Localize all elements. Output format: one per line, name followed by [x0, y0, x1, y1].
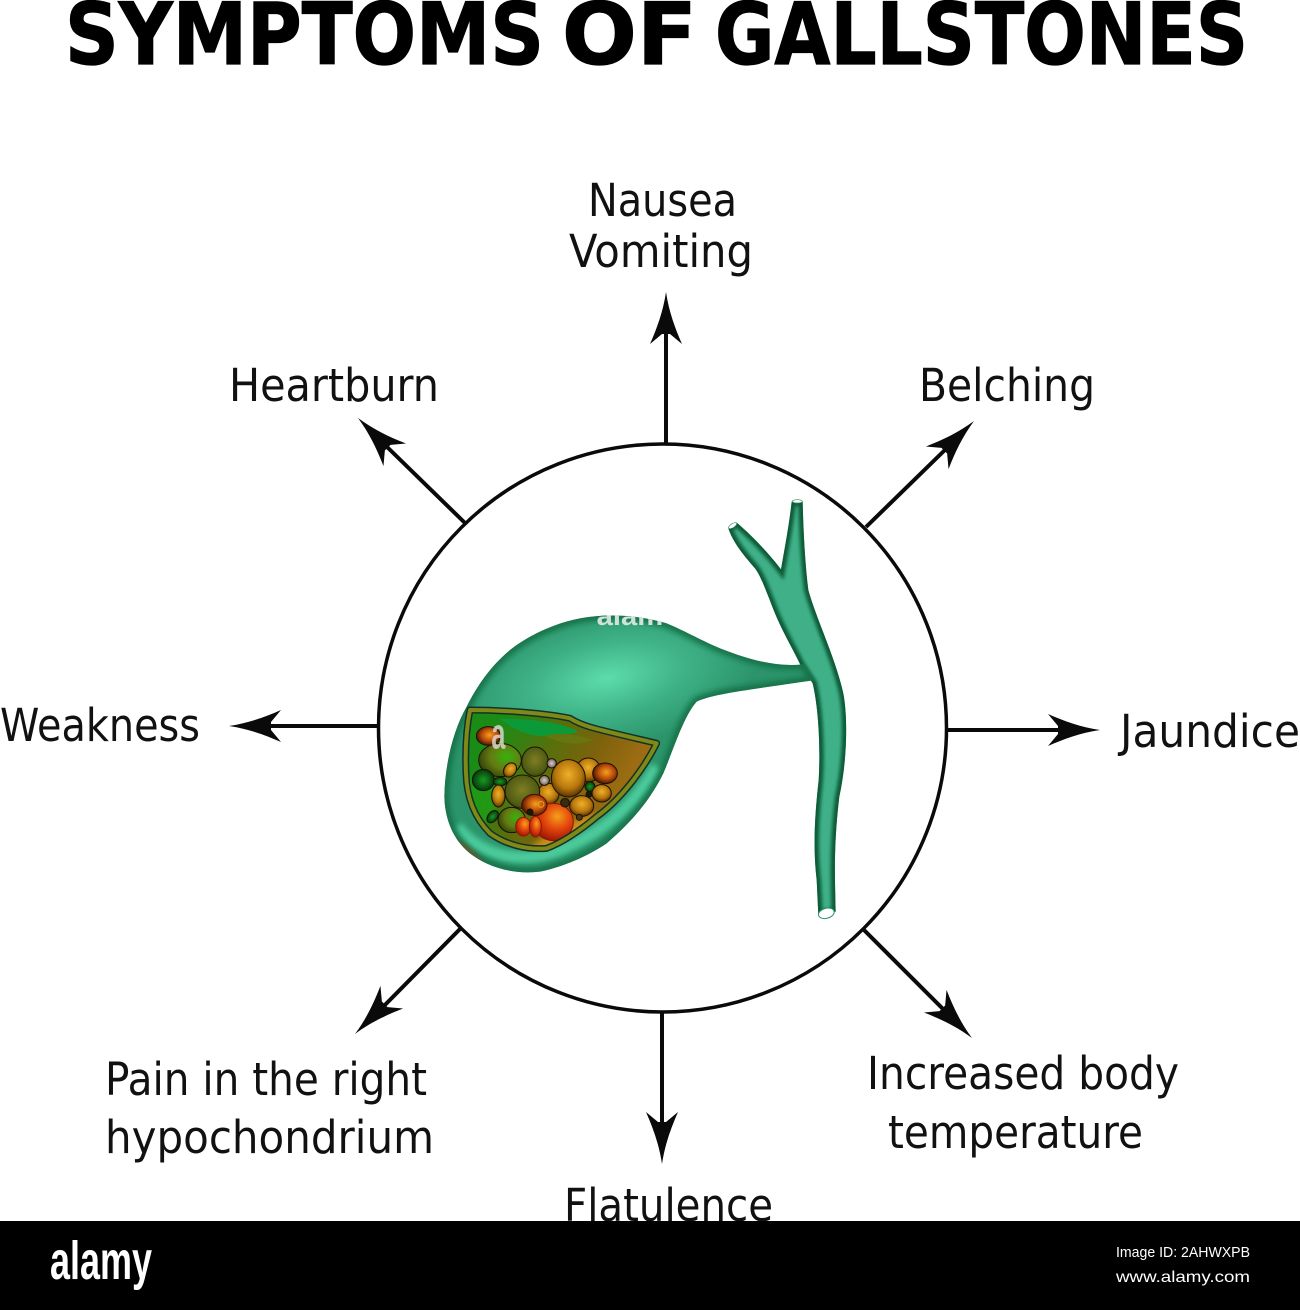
arrow: to Nausea Vomiting — [650, 292, 682, 443]
image id: Image ID: 2AHWXPB — [1116, 1244, 1250, 1261]
label: Heartburn: Heartburn — [229, 359, 439, 412]
label: Increased body temperature — [867, 1047, 1179, 1159]
label: Flatulence: Flatulence — [564, 1179, 773, 1232]
stones — [472, 727, 617, 841]
arrow: to Pain in the right hypochondrium — [344, 928, 461, 1045]
arrow: to Weakness — [229, 710, 379, 742]
gallbladder body — [444, 601, 815, 872]
arrow: to Belching — [866, 410, 985, 527]
label: Pain in the right hypochondrium: hypochondrium — [105, 1111, 434, 1164]
wall band of the cut-away — [466, 710, 657, 849]
watermark fragment: alam — [597, 601, 663, 631]
label: Nausea Vomiting — [569, 174, 753, 278]
watermark letter: a — [491, 710, 506, 758]
label: Increased body temperature: temperature — [888, 1106, 1143, 1159]
label: Increased body temperature: Increased body — [867, 1047, 1179, 1100]
watermark footer bar — [0, 1221, 1300, 1310]
bile duct — [728, 500, 846, 920]
title — [65, 0, 1248, 85]
arrow: to Heartburn — [347, 407, 465, 523]
arrow: to Increased body temperature — [864, 930, 983, 1049]
label: Weakness: Weakness — [0, 699, 200, 752]
label: Pain in the right hypochondrium — [105, 1053, 434, 1164]
arrow: to Jaundice — [946, 714, 1100, 746]
website: www.alamy.com — [1115, 1269, 1250, 1286]
arrow: to Flatulence — [646, 1012, 678, 1164]
gallbladder illustration — [444, 500, 846, 920]
label: Belching: Belching — [919, 359, 1095, 412]
central circle — [378, 444, 946, 1012]
label: Nausea Vomiting: Vomiting — [569, 225, 753, 278]
alamy logo: alamy — [50, 1231, 152, 1291]
label: Nausea Vomiting: Nausea — [588, 174, 737, 227]
label: Pain in the right hypochondrium: Pain in the right — [105, 1053, 427, 1106]
cut-away interior with stones — [463, 710, 657, 865]
